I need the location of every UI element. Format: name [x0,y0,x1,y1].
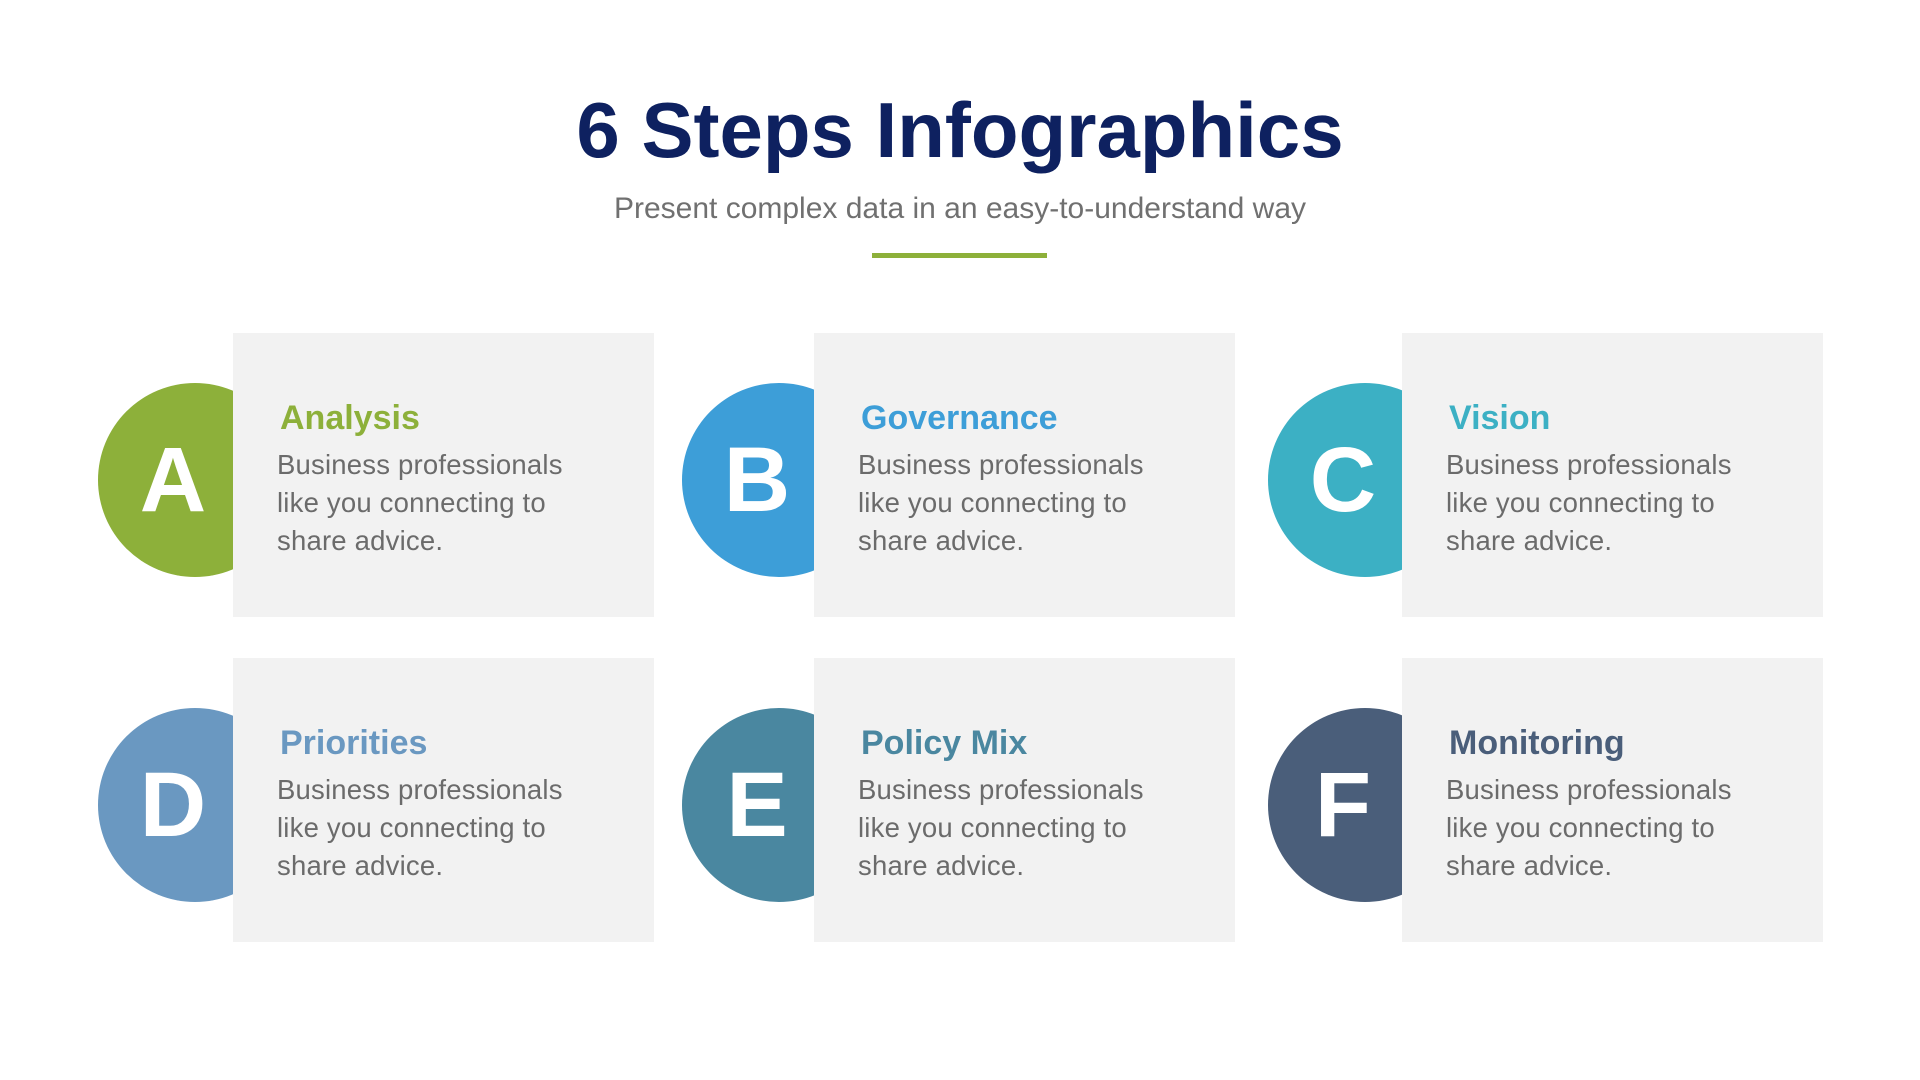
title: 6 Steps Infographics [576,86,1344,174]
circle E [682,708,876,902]
card B: Business professionals [858,449,1144,480]
card E: share advice. [858,850,1024,881]
card A: Business professionals [277,449,563,480]
card F [1402,658,1823,942]
card A: Analysis [280,399,420,437]
card F: Business professionals [1446,774,1732,805]
card D: share advice. [277,850,443,881]
card D: Business professionals [277,774,563,805]
step E [682,658,1235,942]
circle D: D [140,754,206,856]
subtitle: Present complex data in an easy-to-understand way [614,192,1306,225]
card C: Business professionals [1446,449,1732,480]
card E: Business professionals [858,774,1144,805]
card E: Policy Mix [861,724,1027,762]
circle B: B [724,429,790,531]
circle D [98,708,292,902]
card F: Monitoring [1449,724,1625,762]
card E: like you connecting to [858,812,1127,843]
step D [98,658,654,942]
circle F: F [1315,754,1371,856]
card C: Vision [1449,399,1550,437]
card C: like you connecting to [1446,487,1715,518]
card F: share advice. [1446,850,1612,881]
card A [233,333,654,617]
circle B [682,383,876,577]
circle C [1268,383,1462,577]
step F [1268,658,1823,942]
circle A [98,383,292,577]
card D: like you connecting to [277,812,546,843]
card F: like you connecting to [1446,812,1715,843]
card D: Priorities [280,724,427,762]
circle C: C [1310,429,1376,531]
accent line [872,253,1047,258]
circle F [1268,708,1462,902]
card B [814,333,1235,617]
card C: share advice. [1446,525,1612,556]
step A [98,333,654,617]
card E [814,658,1235,942]
circle E: E [726,754,788,856]
card A: like you connecting to [277,487,546,518]
card D [233,658,654,942]
card B: Governance [861,399,1058,437]
circle A: A [140,429,206,531]
step C [1268,333,1823,617]
step B [682,333,1235,617]
card C [1402,333,1823,617]
card A: share advice. [277,525,443,556]
card B: share advice. [858,525,1024,556]
card B: like you connecting to [858,487,1127,518]
